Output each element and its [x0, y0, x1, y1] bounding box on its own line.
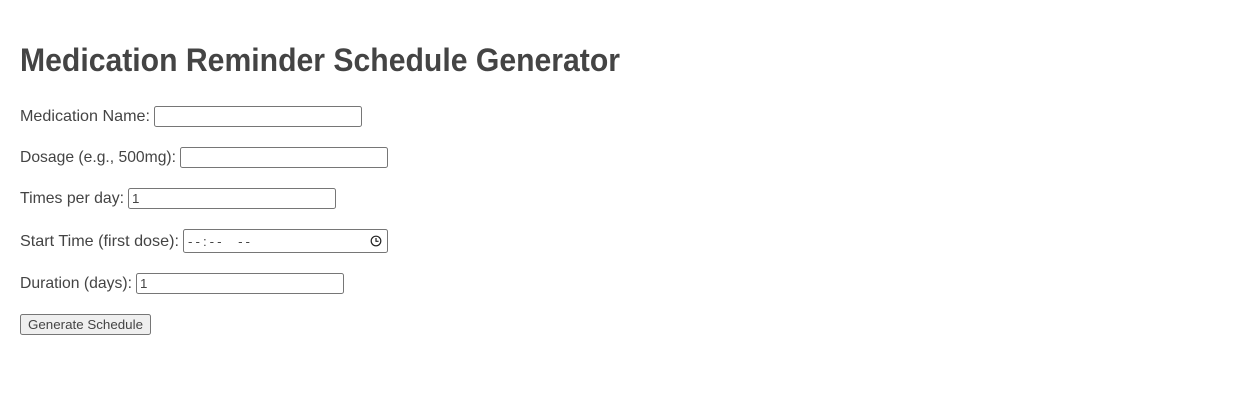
label: medication name: Medication Name:	[20, 108, 150, 125]
label: start time: Start Time (first dose):	[20, 233, 179, 250]
input: times per day: 1	[132, 191, 139, 206]
title: Medication Reminder Schedule Generator	[20, 42, 620, 78]
input: start time	[184, 230, 388, 252]
icon: clock	[371, 236, 381, 246]
field: start time	[20, 230, 388, 252]
input: duration: 1	[140, 276, 147, 291]
input: times per day	[128, 188, 336, 208]
button: generate schedule: Generate Schedule	[28, 317, 143, 332]
label: dosage: Dosage (e.g., 500mg):	[20, 149, 176, 166]
input: dosage	[180, 148, 388, 168]
label: times per day: Times per day:	[20, 190, 124, 207]
label: duration: Duration (days):	[20, 275, 132, 292]
button: generate schedule	[20, 314, 150, 334]
field: medication name	[20, 106, 362, 126]
input: medication name	[154, 106, 362, 126]
input: duration	[136, 274, 344, 294]
field: duration	[20, 274, 344, 294]
field: dosage	[20, 148, 388, 168]
input: start time: --:-- --	[188, 234, 250, 249]
field: times per day	[20, 188, 336, 208]
